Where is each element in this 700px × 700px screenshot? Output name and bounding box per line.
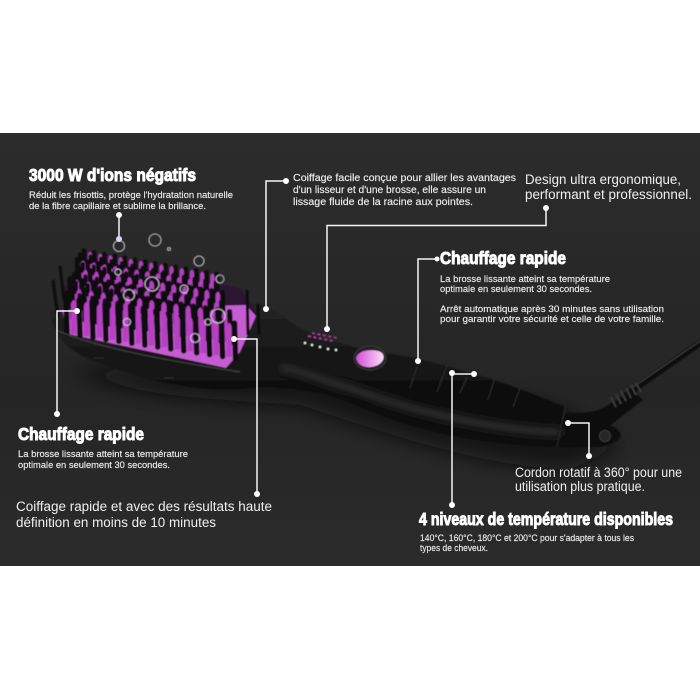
- text block: fast heating right: Arrêt automatique après 30 minutes sans utilisation: [440, 303, 664, 314]
- text block: fast heating left: [18, 424, 188, 470]
- text block: easy styling: lissage fluide de la racine aux pointes.: [293, 197, 473, 208]
- brush head plate: [62, 262, 256, 362]
- icon: hair straightening brush: [50, 234, 700, 470]
- text block: fast styling: [16, 499, 272, 530]
- handle ridges: [410, 365, 520, 407]
- text block: rotating cord: utilisation plus pratique.: [515, 479, 645, 494]
- text block: fast heating right: La brosse lissante atteint sa température: [440, 273, 610, 284]
- text block: fast heating left: optimale en seulement 30 secondes.: [18, 459, 170, 470]
- handle highlight: [280, 368, 560, 432]
- text block: easy styling: d'un lisseur et d'une brosse, elle assure un: [293, 185, 486, 196]
- text block: temperature levels: 140°C, 160°C, 180°C et 200°C pour s'adapter à tous les: [420, 532, 634, 543]
- text block: rotating cord: [515, 465, 682, 494]
- text block: ergonomic design: performant et professionnel.: [525, 187, 692, 202]
- side bristles: [53, 266, 259, 335]
- text block: fast heating right: [440, 248, 664, 324]
- text block: fast heating left: Chauffage rapide: [18, 424, 144, 444]
- power cord: [557, 340, 700, 447]
- text block: fast heating right: optimale en seulement 30 secondes.: [440, 283, 592, 294]
- callout lines: [54, 178, 592, 508]
- text block: ergonomic design: [525, 172, 692, 202]
- text block: negative ions: 3000 W d'ions négatifs: [29, 165, 196, 185]
- text block: fast heating right: Chauffage rapide: [440, 248, 566, 268]
- text block: negative ions: [29, 165, 233, 211]
- text block: negative ions: Réduit les frisottis, protège l'hydratation naturelle: [29, 189, 233, 200]
- dark background panel: [0, 133, 700, 566]
- text block: temperature levels: [419, 509, 673, 553]
- bristle rows: [66, 250, 236, 359]
- power button: [354, 346, 386, 370]
- text block: temperature levels: types de cheveux.: [420, 542, 488, 553]
- temperature indicators: [304, 333, 337, 351]
- brush body and handle: [50, 290, 565, 447]
- head rim highlight: [56, 330, 240, 372]
- text block: fast heating left: La brosse lissante atteint sa température: [18, 448, 188, 459]
- text block: fast heating right: pour garantir votre sécurité et celle de votre famille.: [440, 313, 664, 324]
- text block: ergonomic design: Design ultra ergonomique,: [525, 172, 681, 187]
- pink plate lobes: [62, 305, 256, 368]
- text block: fast styling: Coiffage rapide et avec des résultats haute: [16, 499, 272, 514]
- text block: easy styling: Coiffage facile conçue pour allier les avantages: [293, 173, 516, 184]
- collar: [557, 407, 565, 447]
- text block: rotating cord: Cordon rotatif à 360° pour une: [515, 465, 682, 480]
- bubbles: [114, 234, 225, 342]
- text block: easy styling: [293, 173, 516, 208]
- text block: negative ions: de la fibre capillaire et sublime la brillance.: [29, 200, 206, 211]
- text block: fast styling: définition en moins de 10 minutes: [16, 515, 216, 530]
